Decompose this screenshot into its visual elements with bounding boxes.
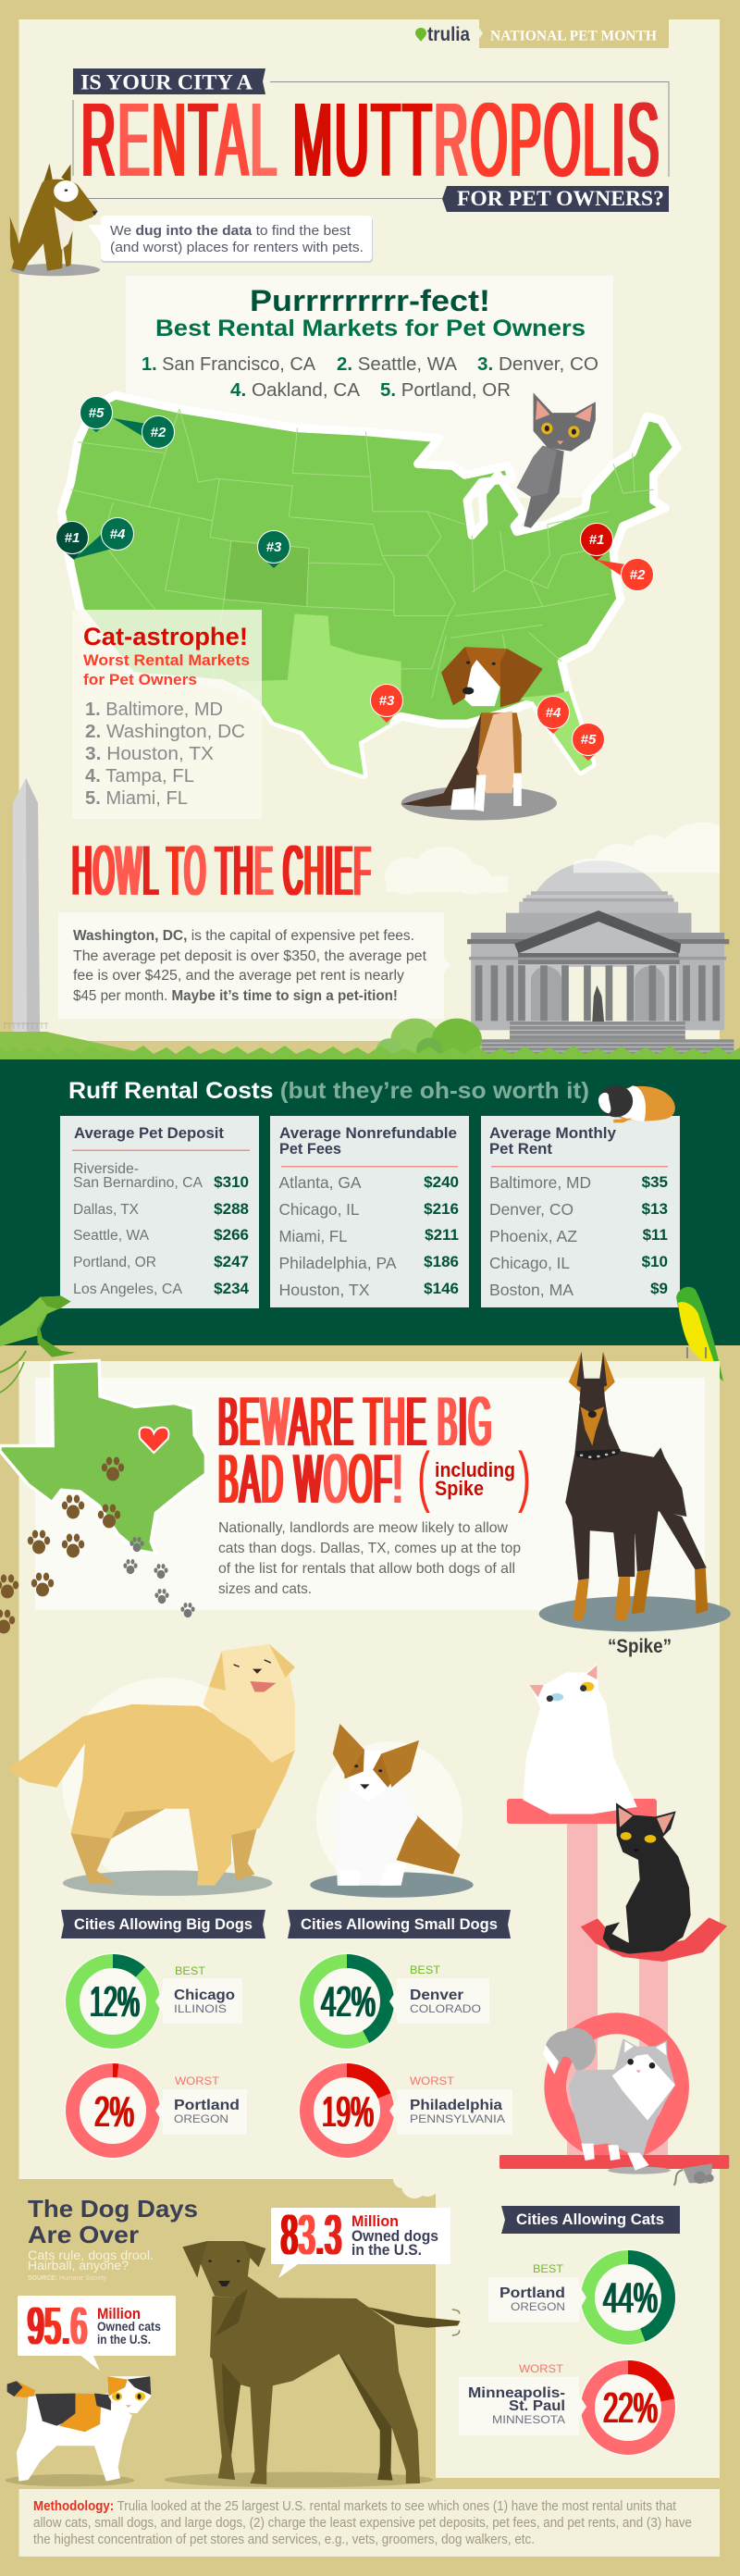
ring and grey cat <box>500 2012 729 2186</box>
callout: intro <box>88 216 373 263</box>
cat tree <box>507 1799 668 2156</box>
callout: 83.3 million dogs: in the U.S. <box>352 2241 422 2259</box>
pin: worst #2 Washington <box>597 559 653 590</box>
donut: minneapolis 22% <box>579 2359 677 2456</box>
callout: 83.3 million dogs: Million <box>352 2212 399 2230</box>
heading: the dog days are over <box>28 2195 198 2282</box>
card: average nonrefundable pet fees: Miami, FL <box>279 1227 348 1245</box>
pin: worst #4 Tampa: #4 <box>546 705 561 721</box>
state: colorado <box>224 540 309 607</box>
icon: guinea pig <box>598 1085 675 1122</box>
list: worst cities: 3. Houston, TX <box>85 744 214 764</box>
icon: mouse <box>673 2163 714 2186</box>
label: best chicago: Chicago <box>174 1988 235 2003</box>
callout: 83.3 million dogs: 83.3 <box>281 2204 342 2266</box>
text block: nationally <box>218 1520 521 1597</box>
card: average pet deposit: Seattle, WA <box>73 1228 150 1244</box>
card: average monthly pet rent: $9 <box>650 1280 668 1297</box>
heading: beware the big bad woof <box>218 1382 531 1517</box>
heading: ruff rental costs: Ruff Rental Costs (but they’re oh-so worth it) <box>68 1078 589 1104</box>
grass <box>0 1032 740 1060</box>
label: worst minneapolis: Minneapolis- <box>468 2385 565 2401</box>
card: average monthly pet rent: $35 <box>642 1173 668 1191</box>
heading: beware the big bad woof: BAD WOOF! <box>218 1440 403 1517</box>
card: average pet deposit: $310 <box>214 1173 249 1191</box>
icon: beagle <box>401 647 557 821</box>
donut: denver 42% <box>298 1952 396 2050</box>
panel: best rental markets <box>126 276 613 498</box>
text block: washington dc: fee is over $425, and the average pet rent is nearly <box>73 968 404 984</box>
banner: is your city a: IS YOUR CITY A <box>80 70 253 94</box>
parenthetical: including spike <box>417 1440 531 1514</box>
card: average monthly pet rent: Average Monthly <box>489 1124 617 1142</box>
card: average monthly pet rent: $10 <box>642 1253 668 1270</box>
card: average pet deposit: San Bernardino, CA <box>73 1175 204 1191</box>
card: average monthly pet rent: Pet Rent <box>489 1140 552 1158</box>
pin: worst #5 Miami <box>572 724 605 761</box>
list: best cities: 3. Denver, CO <box>477 354 598 375</box>
pin: worst #4 Tampa <box>536 696 570 734</box>
text block: nationally: Nationally, landlords are meow likely to allow <box>218 1520 508 1536</box>
label: best denver: Denver <box>410 1988 463 2003</box>
label: worst minneapolis <box>459 2362 586 2435</box>
callout: 95.6 million cats: Owned cats <box>97 2319 161 2334</box>
card: average pet deposit: $247 <box>214 1253 249 1270</box>
label: best denver: COLORADO <box>410 2002 481 2015</box>
card: average nonrefundable pet fees: $216 <box>424 1200 459 1218</box>
panel: methodology <box>18 2489 720 2557</box>
list: best cities <box>142 354 598 401</box>
card: average pet deposit <box>60 1116 259 1308</box>
banner: cities allowing big dogs: Cities Allowing Big Dogs <box>74 1915 253 1933</box>
callout: 83.3 million dogs: Owned dogs <box>352 2227 438 2245</box>
card: average monthly pet rent: Phoenix, AZ <box>489 1227 577 1245</box>
card: average nonrefundable pet fees: $240 <box>424 1173 459 1191</box>
tab: national pet month: NATIONAL PET MONTH <box>490 28 658 44</box>
label: best chicago <box>155 1964 242 2024</box>
card: average pet deposit: $266 <box>214 1226 249 1244</box>
pin: worst #3 Houston: #3 <box>379 693 395 709</box>
label: worst minneapolis: St. Paul <box>509 2398 565 2414</box>
pin: best #2 Seattle <box>113 416 174 448</box>
pin: worst #3 Houston <box>370 685 403 723</box>
label: best denver: BEST <box>410 1963 441 1976</box>
platform: base <box>500 2155 729 2169</box>
card: average pet deposit: $288 <box>214 1200 249 1218</box>
pin: best #3 Denver: #3 <box>266 539 282 555</box>
card: average nonrefundable pet fees: $186 <box>424 1253 459 1270</box>
icon: doberman spike <box>539 1352 731 1631</box>
label: spike: “Spike” <box>608 1636 672 1657</box>
paws: brown <box>0 1456 124 1634</box>
label: worst portland: OREGON <box>174 2112 228 2125</box>
icon: wag marks <box>452 2310 460 2335</box>
card: average monthly pet rent: Baltimore, MD <box>489 1173 591 1192</box>
parenthetical: including spike: ) <box>518 1440 531 1514</box>
text block: washington dc <box>58 912 450 1019</box>
pin: best #2 Seattle: #2 <box>151 425 166 440</box>
title frame lines <box>73 81 669 198</box>
label: worst philadelphia <box>389 2074 512 2135</box>
parenthetical: including spike: including <box>435 1458 515 1481</box>
list: worst cities: 4. Tampa, FL <box>85 766 194 786</box>
label: best portland cats: OREGON <box>511 2300 565 2313</box>
heading: beware the big bad woof: BEWARE THE BIG <box>218 1382 493 1460</box>
banner: cities allowing big dogs <box>61 1910 265 1938</box>
panel: methodology: the highest concentration of pet stores and services, e.g., vets, groomers, dog walkers, etc. <box>33 2533 535 2547</box>
card: average nonrefundable pet fees: Pet Fees <box>279 1140 341 1158</box>
icon: heart <box>140 1427 168 1453</box>
banner: cities allowing small dogs: Cities Allowing Small Dogs <box>301 1915 498 1933</box>
icon: corgi <box>310 1724 474 1898</box>
icon: calico cat <box>6 2376 151 2486</box>
label: best chicago: BEST <box>175 1964 206 1977</box>
donut: portland 2% <box>65 2062 161 2160</box>
panel: methodology: Methodology: Trulia looked at the 25 largest U.S. rental markets to see which ones (1) have the most rental units that <box>33 2499 676 2514</box>
pin: best #3 Denver <box>257 531 290 568</box>
pin: best #5 Portland <box>80 396 113 432</box>
card: average nonrefundable pet fees <box>270 1116 469 1307</box>
panel: methodology: allow cats, small dogs, and large dogs, (2) charge the least expensive pet deposits, pet fees, and pet rents, and (3) have <box>33 2516 692 2531</box>
card: average nonrefundable pet fees: Average Nonrefundable <box>279 1124 457 1142</box>
logo: trulia: trulia <box>427 24 470 45</box>
heading: the dog days are over: Are Over <box>28 2221 139 2248</box>
donut: philadelphia 19%: 19% <box>322 2087 374 2136</box>
label: worst philadelphia: Philadelphia <box>410 2098 502 2113</box>
cloud <box>385 847 508 895</box>
label: best portland cats <box>488 2262 586 2322</box>
pin: best #4 Oakland: #4 <box>110 526 126 542</box>
card: average nonrefundable pet fees: $146 <box>424 1280 459 1297</box>
label: worst minneapolis: WORST <box>519 2362 564 2375</box>
banner: cities allowing cats <box>501 2206 680 2234</box>
icon: brown dog <box>9 164 100 276</box>
donut: philadelphia 19% <box>298 2062 396 2160</box>
label: worst philadelphia: WORST <box>410 2074 455 2087</box>
heading: howl to the chief: HOWL TO THE CHIEF <box>72 832 372 910</box>
heading: the dog days are over: Cats rule, dogs drool. <box>28 2248 154 2262</box>
map: texas <box>0 1361 205 1554</box>
parenthetical: including spike: ( <box>417 1440 430 1514</box>
label: worst portland: WORST <box>175 2074 220 2087</box>
icon: parrot <box>676 1287 723 1381</box>
pin: worst #1 Baltimore: #1 <box>589 532 604 548</box>
hammock <box>581 1917 727 1962</box>
map pins <box>56 396 653 761</box>
icon: black cat <box>603 1802 691 1954</box>
donut: minneapolis 22%: 22% <box>603 2384 658 2432</box>
list: worst cities: 2. Washington, DC <box>85 722 245 742</box>
list: best cities: 4. Oakland, CA <box>230 380 361 401</box>
banner: cities allowing cats: Cities Allowing Cats <box>516 2211 664 2228</box>
card: average pet deposit: Average Pet Deposit <box>74 1124 224 1142</box>
pin: worst #2 Washington: #2 <box>630 567 646 583</box>
text block: washington dc: The average pet deposit is over $350, the average pet <box>73 948 427 964</box>
callout: intro: We dug into the data to find the best <box>110 223 352 239</box>
heading: the dog days are over: The Dog Days <box>28 2195 198 2223</box>
map: united states <box>61 395 677 775</box>
header <box>9 19 669 276</box>
card: average monthly pet rent: Denver, CO <box>489 1200 574 1219</box>
text block: nationally: cats than dogs. Dallas, TX, comes up at the top <box>218 1541 521 1556</box>
callout: 95.6 million cats: in the U.S. <box>97 2332 151 2347</box>
pin: best #1 San Francisco <box>56 522 89 560</box>
card: average monthly pet rent <box>481 1116 680 1307</box>
text block: nationally: of the list for rentals that allow both dogs of all <box>218 1561 515 1577</box>
heading: purrrfect: Purrrrrrrrr-fect! <box>250 284 490 317</box>
heading: the dog days are over: Hairball, anyone? <box>28 2259 129 2273</box>
label: best denver <box>389 1963 489 2024</box>
donut: portland cats 44%: 44% <box>603 2273 658 2322</box>
card: average pet deposit: Los Angeles, CA <box>73 1282 183 1297</box>
icon: white cat <box>523 1664 637 1814</box>
vine <box>0 1362 24 1393</box>
donut: portland 2%: 2% <box>94 2087 134 2136</box>
tan strip under panel <box>0 1041 740 1059</box>
text block: nationally: sizes and cats. <box>218 1581 312 1597</box>
list: best cities: 1. San Francisco, CA <box>142 354 316 375</box>
callout: 95.6 million cats: 95.6 <box>28 2297 88 2356</box>
pin: worst #1 Baltimore <box>581 524 612 561</box>
card: average monthly pet rent: Chicago, IL <box>489 1254 570 1272</box>
subheading: for pet owners: for Pet Owners <box>83 671 197 688</box>
label: best chicago: ILLINOIS <box>174 2002 227 2015</box>
platform: top <box>507 1799 657 1824</box>
donut: portland cats 44% <box>579 2248 677 2347</box>
list: best cities: 2. Seattle, WA <box>337 354 458 375</box>
card: average pet deposit: Portland, OR <box>73 1255 156 1270</box>
panel: beware cream section <box>18 1361 720 2478</box>
icon: grey cat <box>543 2028 675 2171</box>
pin: best #1 San Francisco: #1 <box>65 530 80 546</box>
callout: intro: (and worst) places for renters with pets. <box>110 240 364 255</box>
list: worst cities: 5. Miami, FL <box>85 788 188 809</box>
donut: chicago 12%: 12% <box>90 1977 140 2025</box>
parenthetical: including spike: Spike <box>435 1477 484 1500</box>
card: average monthly pet rent: $13 <box>642 1200 668 1218</box>
title: rental muttropolis: RENTAL MUTTROPOLIS <box>81 81 661 198</box>
state: texas <box>236 614 401 775</box>
label: best portland cats: BEST <box>533 2262 564 2275</box>
card: average nonrefundable pet fees: Philadelphia, PA <box>279 1254 397 1272</box>
donut: chicago 12% <box>65 1952 161 2050</box>
paw prints <box>0 1456 195 1634</box>
label: worst minneapolis: MINNESOTA <box>492 2413 565 2426</box>
card: average nonrefundable pet fees: Atlanta, GA <box>279 1173 362 1192</box>
icon: jefferson memorial <box>467 861 734 1055</box>
bushes <box>376 1019 482 1062</box>
panel: worst rental markets <box>72 610 262 819</box>
callout: 83.3 million dogs <box>271 2204 450 2278</box>
pin: best #4 Oakland <box>74 518 133 559</box>
banner: for pet owners: FOR PET OWNERS? <box>457 187 664 210</box>
list: worst cities: 1. Baltimore, MD <box>85 700 223 720</box>
list: worst cities <box>85 700 245 809</box>
icon: iguana <box>0 1296 76 1372</box>
subheading: worst rental markets: Worst Rental Markets <box>83 651 250 669</box>
panel: ruff rental costs band <box>0 1059 740 1345</box>
card: average nonrefundable pet fees: $211 <box>425 1226 459 1244</box>
paws: grey <box>123 1537 195 1617</box>
banner: cities allowing small dogs <box>288 1910 511 1938</box>
list: best cities: 5. Portland, OR <box>380 380 511 401</box>
donut: denver 42%: 42% <box>321 1977 376 2025</box>
card: average pet deposit: Dallas, TX <box>73 1202 140 1218</box>
icon: large brown dog <box>165 2241 460 2487</box>
card: average monthly pet rent: Boston, MA <box>489 1281 574 1299</box>
card: average monthly pet rent: $11 <box>643 1226 668 1244</box>
callout: 95.6 million cats <box>18 2296 176 2371</box>
label: worst portland <box>155 2074 247 2135</box>
text block: washington dc: $45 per month. Maybe it’s time to sign a pet-ition! <box>73 988 398 1004</box>
tab: national pet month <box>479 19 669 48</box>
label: worst portland: Portland <box>174 2098 240 2113</box>
card: average nonrefundable pet fees: Chicago, IL <box>279 1200 360 1219</box>
icon: golden retriever <box>7 1644 295 1896</box>
heading: best rental markets: Best Rental Markets for Pet Owners <box>155 316 586 341</box>
label: worst philadelphia: PENNSYLVANIA <box>410 2112 505 2125</box>
icon: grey cat <box>517 392 596 528</box>
ring <box>544 2012 689 2161</box>
card: average pet deposit: Riverside- <box>73 1161 139 1177</box>
icon: washington monument <box>4 778 48 1033</box>
heading: the dog days are over: SOURCE: Humane Society <box>28 2273 106 2282</box>
hammock and black cat <box>581 1802 727 1962</box>
cloud edge <box>393 2170 440 2198</box>
heading: cat-astrophe: Cat-astrophe! <box>83 623 248 650</box>
label: best portland cats: Portland <box>500 2285 565 2301</box>
posts <box>567 1824 598 2156</box>
callout: 95.6 million cats: Million <box>97 2305 141 2322</box>
panel: cream top section <box>18 19 720 1041</box>
pin: worst #5 Miami: #5 <box>581 732 597 748</box>
card: average nonrefundable pet fees: Houston, TX <box>279 1281 370 1299</box>
state: florida <box>514 691 592 772</box>
card: average pet deposit: $234 <box>214 1280 250 1297</box>
pin: best #5 Portland: #5 <box>89 405 105 421</box>
cloud: over dome <box>574 823 720 873</box>
text block: washington dc: Washington, DC, is the capital of expensive pet fees. <box>73 928 414 944</box>
